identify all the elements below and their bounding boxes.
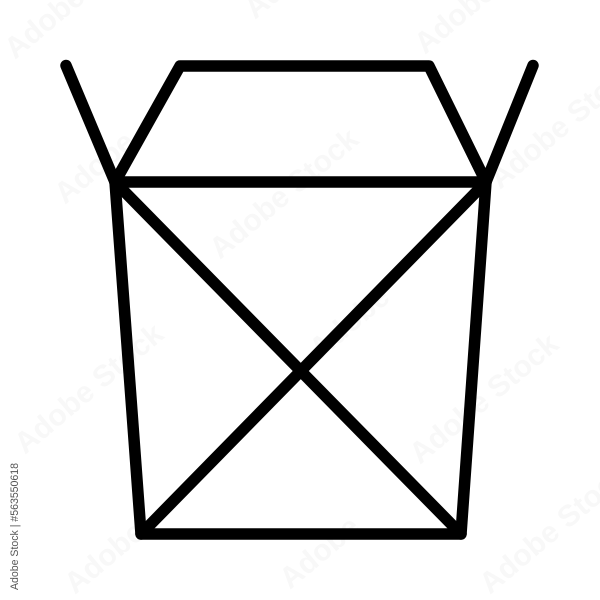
faint watermark pattern: Adobe: [303, 280, 396, 365]
faint watermark pattern: Adobe Stock: [203, 122, 365, 265]
faint watermark pattern: Adobe Stock: [8, 317, 170, 460]
right flap: [486, 66, 533, 182]
rim: [115, 176, 486, 188]
watermark id: Adobe Stock | #563550618: [9, 463, 21, 590]
faint watermark pattern: Adobe: [48, 125, 141, 210]
left flap: [66, 66, 115, 182]
faint watermark pattern: Adobe: [58, 515, 151, 600]
cross diagonal one: [115, 182, 461, 534]
body: [115, 182, 486, 534]
lid: [115, 66, 486, 182]
cross diagonal two: [141, 182, 486, 534]
box outline: [66, 66, 533, 534]
faint watermark pattern: Adobe Stock: [403, 327, 565, 470]
faint watermark pattern: Adobe: [273, 510, 366, 595]
